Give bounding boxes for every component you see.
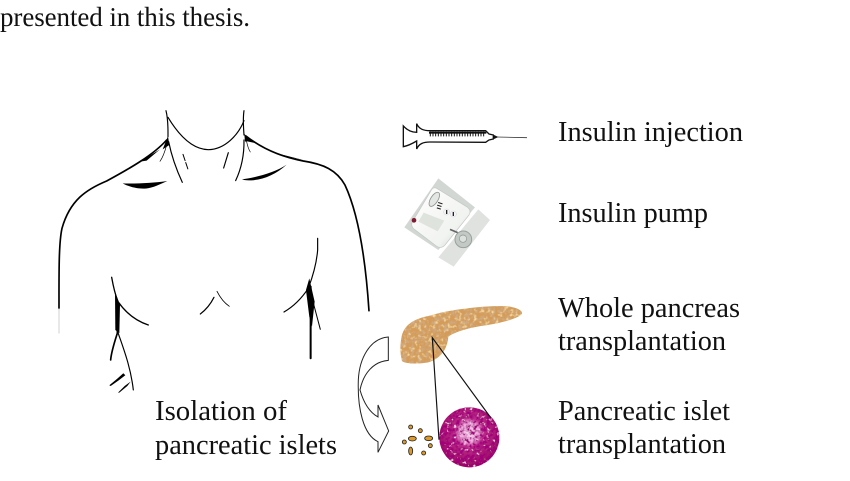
adhesive patch	[404, 178, 475, 250]
left collarbone	[123, 181, 167, 189]
label: isolation of pancreatic islets: Isolation of	[155, 396, 288, 427]
crease junction thickening	[115, 292, 120, 333]
label: pancreatic islet transplantation: transplantation	[558, 429, 726, 460]
infusion set	[455, 231, 472, 248]
isolation arrow	[358, 337, 389, 452]
pump display	[427, 191, 442, 208]
isolated islet cells	[402, 425, 433, 455]
neck junction wedges	[163, 136, 169, 149]
neck outline	[166, 111, 244, 137]
illustration: human torso line drawing	[59, 111, 369, 393]
label: whole pancreas transplantation	[558, 293, 740, 357]
plunger and barrel	[403, 124, 493, 149]
magnified islet micrograph	[439, 407, 499, 467]
red indicator	[412, 218, 416, 223]
icon: insulin pump	[404, 178, 490, 267]
right collarbone	[242, 165, 287, 180]
pump window	[418, 213, 444, 231]
label: whole pancreas transplantation: transplantation	[558, 326, 726, 357]
label: whole pancreas transplantation: Whole pancreas	[558, 293, 740, 324]
label: pancreatic islet transplantation: Pancreatic islet	[558, 396, 730, 427]
label: isolation of pancreatic islets: pancreatic islets	[155, 430, 337, 461]
icon: syringe	[403, 124, 527, 149]
shoulder and arm outlines	[59, 111, 369, 390]
left hand marks	[109, 373, 125, 386]
heading: thesis text fragment: presented in this thesis.	[0, 2, 250, 32]
needle	[493, 135, 498, 139]
pump buttons	[444, 209, 450, 215]
pancreas and islets	[358, 306, 522, 467]
magnification lines	[432, 338, 491, 440]
label: pancreatic islet transplantation	[558, 396, 730, 460]
label: insulin injection: Insulin injection	[558, 117, 743, 148]
graduated scale	[429, 132, 486, 134]
inner neck lines	[169, 142, 182, 182]
label: isolation of pancreatic islets	[155, 396, 337, 461]
chest creases	[112, 277, 148, 325]
label: insulin pump: Insulin pump	[558, 198, 708, 229]
whole pancreas organ	[400, 306, 522, 363]
pump body	[412, 188, 470, 247]
